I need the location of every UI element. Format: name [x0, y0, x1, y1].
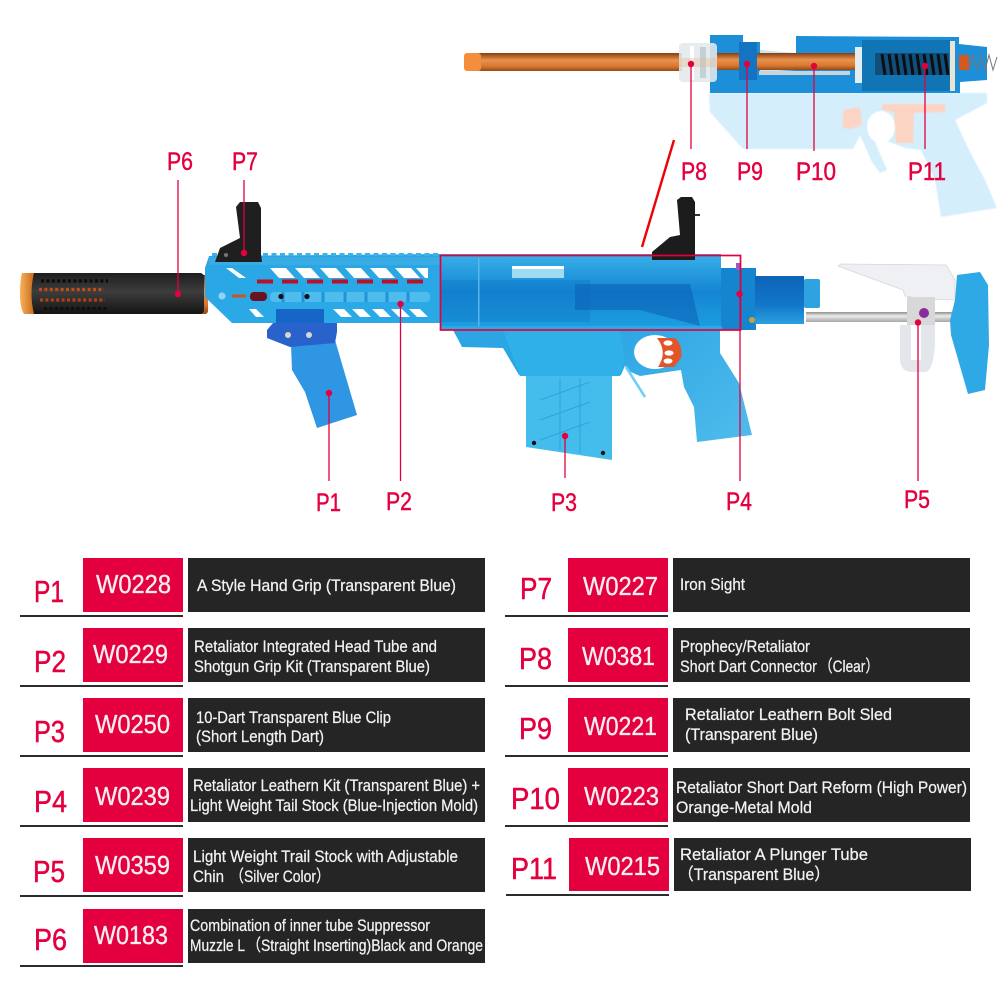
row P1: W0228	[96, 569, 171, 599]
leader P4	[736, 291, 743, 481]
butt stock	[950, 272, 989, 394]
row P7	[505, 558, 970, 617]
callout leaders and dots	[175, 61, 928, 481]
leader P5	[915, 319, 921, 481]
label P5: P5	[904, 486, 930, 514]
row P5	[20, 838, 485, 897]
parts table: left column	[20, 558, 485, 967]
row P5: W0359	[95, 850, 170, 880]
leader P2	[397, 301, 404, 481]
row P10: Retaliator Short Dart Reform (High Power)	[676, 778, 967, 797]
leader P9	[744, 61, 750, 149]
rear spring	[969, 55, 997, 70]
label P3: P3	[551, 489, 577, 517]
row P8: Prophecy/Retaliator	[680, 637, 810, 656]
row P8: （Clear）	[819, 657, 879, 676]
foregrip bracket area under handguard	[452, 328, 640, 375]
row P2: Shotgun Grip Kit (Transparent Blue)	[194, 657, 430, 676]
leader P7	[241, 180, 247, 256]
row P7: W0227	[583, 571, 658, 601]
front hand grip	[267, 323, 357, 428]
row P9	[505, 698, 970, 757]
pale blue ghost lower receiver and grip	[709, 93, 997, 217]
row P4: W0239	[95, 781, 170, 811]
leader P6	[175, 180, 181, 297]
row P10	[505, 768, 970, 827]
row P9: W0221	[584, 711, 657, 741]
row P11: W0215	[585, 851, 660, 881]
label P1: P1	[316, 489, 341, 517]
row P6: Combination of inner tube Suppressor	[190, 916, 430, 935]
row P3: 10-Dart Transparent Blue Clip	[196, 708, 391, 727]
label P10: P10	[796, 158, 836, 186]
orange metal inner barrel	[464, 53, 855, 71]
label P11: P11	[908, 158, 946, 186]
row P6: （Straight Inserting)Black and Orange	[247, 936, 483, 955]
row P11	[506, 838, 971, 896]
row P9: Retaliator Leathern Bolt Sled	[685, 705, 892, 724]
integrated head tube handguard	[205, 254, 445, 323]
magazine clip	[526, 376, 612, 460]
leader P10	[811, 63, 817, 151]
row P2: Retaliator Integrated Head Tube and	[194, 637, 437, 656]
row P2	[20, 628, 485, 687]
row P5: （Silver Color）	[230, 867, 330, 886]
row P1	[20, 558, 485, 617]
row P4: Retaliator Leathern Kit (Transparent Blue) +	[193, 776, 480, 795]
plunger tube	[855, 40, 969, 91]
rear tube and cap	[720, 263, 820, 330]
row P11: P11	[511, 851, 557, 886]
row P5: Chin	[193, 867, 224, 886]
label P7: P7	[232, 148, 258, 176]
leader P1	[326, 390, 332, 481]
row P6: W0183	[94, 920, 168, 950]
row P8	[505, 628, 970, 687]
label P2: P2	[386, 488, 412, 516]
row P5: P5	[33, 854, 65, 889]
label P8: P8	[681, 158, 707, 186]
blue upper receiver shell	[710, 35, 987, 93]
suppressor muzzle	[20, 273, 208, 314]
row P9: (Transparent Blue)	[685, 725, 818, 744]
row P2: P2	[34, 644, 66, 679]
label P4: P4	[726, 488, 752, 516]
magazine well	[503, 330, 632, 376]
row P11: Retaliator A Plunger Tube	[680, 845, 868, 864]
diagram part labels	[167, 148, 946, 517]
row P3	[20, 698, 485, 757]
row P4	[20, 768, 485, 827]
row P1: A Style Hand Grip (Transparent Blue)	[197, 576, 456, 595]
row P3: W0250	[95, 709, 170, 739]
row P6	[20, 909, 485, 967]
row P8: Short Dart Connector	[680, 657, 817, 676]
blue bolt sled	[739, 42, 757, 80]
front iron sight	[215, 202, 262, 262]
row P2: W0229	[93, 639, 168, 669]
row P6: Muzzle L	[190, 936, 245, 955]
row P11: （Transparent Blue）	[678, 865, 830, 884]
red highlight box	[440, 256, 740, 330]
rear iron sight	[652, 197, 700, 260]
illustration: assembled blaster	[20, 197, 989, 460]
label P9: P9	[737, 158, 763, 186]
row P10: W0223	[584, 781, 659, 811]
row P4: P4	[34, 784, 67, 819]
row P3: P3	[34, 714, 65, 749]
row P1: P1	[34, 574, 64, 609]
illustration: detail view of internal barrel and plunger	[464, 35, 997, 217]
row P7: Iron Sight	[680, 575, 745, 594]
clear short dart connector	[679, 43, 717, 82]
row P3: (Short Length Dart)	[196, 727, 324, 746]
pointer line from detail view to receiver	[642, 140, 674, 247]
leader P11	[922, 63, 928, 149]
row P4: Light Weight Tail Stock (Blue-Injection Mold)	[190, 796, 478, 815]
parts table: right column	[505, 558, 971, 896]
leader P3	[562, 433, 568, 478]
row P7: P7	[520, 571, 552, 606]
row P8: P8	[519, 641, 552, 676]
pistol grip and trigger guard	[620, 330, 752, 442]
row P5: Light Weight Trail Stock with Adjustable	[193, 847, 458, 866]
row P8: W0381	[582, 641, 655, 671]
row P9: P9	[519, 711, 552, 746]
stock rod	[806, 312, 954, 322]
grey sled strip	[759, 71, 850, 75]
adjustable cheek rest	[838, 264, 955, 372]
leader P8	[688, 61, 694, 149]
row P10: Orange-Metal Mold	[676, 798, 812, 817]
receiver leathern kit	[440, 254, 722, 330]
row P10: P10	[511, 781, 560, 816]
row P6: P6	[34, 922, 67, 957]
label P6: P6	[167, 148, 193, 176]
